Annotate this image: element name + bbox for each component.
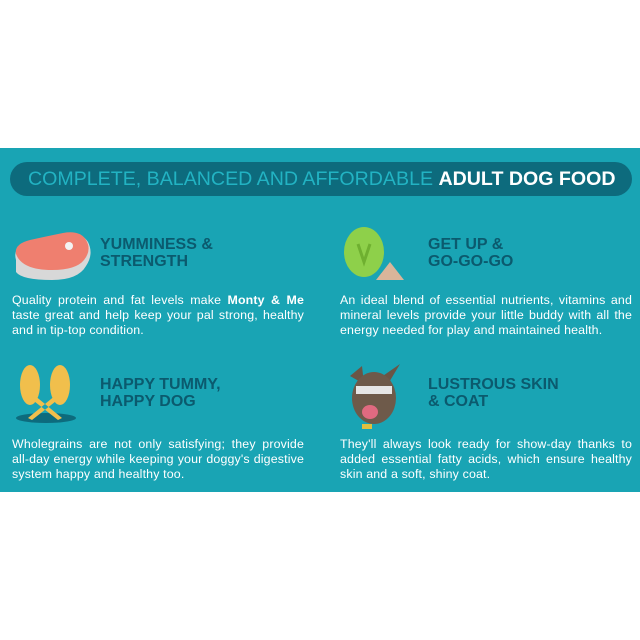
text: happy tummy: Wholegrains are not only satisfying; they provide all-day energy while keeping your doggy's digestive system happy and healthy too. — [12, 437, 304, 481]
icon: dog — [350, 364, 400, 429]
text: get up: An ideal blend of essential nutrients, vitamins and mineral levels provide your little buddy with all the energy needed for play and maintained health. — [340, 293, 632, 337]
icon: steak — [15, 232, 91, 280]
heading: yumminess: YUMMINESS & — [100, 236, 213, 253]
heading: get up: GO-GO-GO — [428, 253, 513, 270]
heading: yumminess — [100, 236, 213, 270]
title banner — [10, 162, 632, 196]
icon: green tablet — [344, 227, 404, 280]
heading: happy tummy: HAPPY DOG — [100, 393, 196, 410]
heading: yumminess: STRENGTH — [100, 253, 188, 270]
text: lustrous: They'll always look ready for show-day thanks to added essential fatty acids, which ensure healthy skin and a soft, shiny coat. — [340, 437, 632, 481]
title banner: COMPLETE, BALANCED AND AFFORDABLE ADULT DOG FOOD — [28, 168, 616, 190]
heading: happy tummy — [100, 376, 221, 410]
icon: wheat — [16, 365, 76, 423]
heading: get up — [428, 236, 513, 270]
heading: happy tummy: HAPPY TUMMY, — [100, 376, 221, 393]
heading: get up: GET UP & — [428, 236, 503, 253]
heading: lustrous: LUSTROUS SKIN — [428, 376, 559, 393]
heading: lustrous — [428, 376, 559, 410]
panel: teal background — [0, 148, 640, 492]
text: yumminess: Quality protein and fat levels make Monty & Me taste great and help keep your pal strong, healthy and in tip-top condition. — [12, 293, 304, 337]
heading: lustrous: & COAT — [428, 393, 488, 410]
